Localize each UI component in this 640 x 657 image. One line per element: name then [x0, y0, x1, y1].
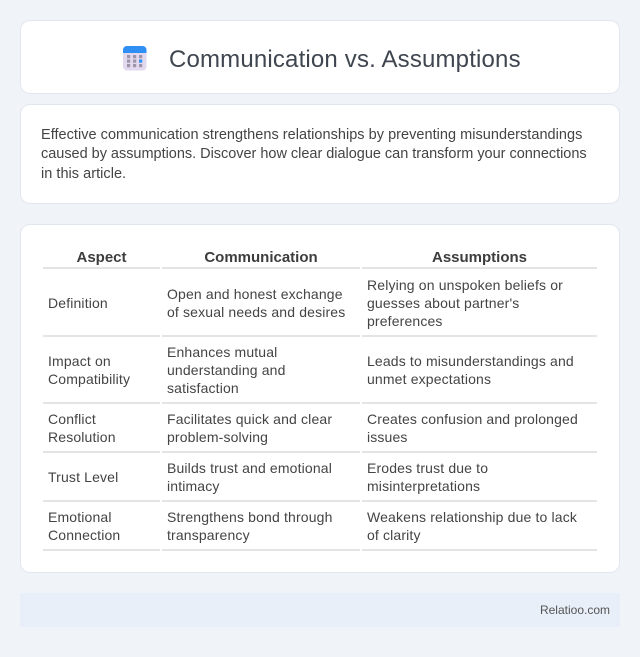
row label: Conflict Resolution: Conflict [48, 411, 96, 427]
row label: Emotional Connection: Emotional [48, 509, 112, 525]
cell: Emotional communication: Strengthens bond through [167, 509, 333, 525]
title: Communication vs. Assumptions [169, 46, 521, 73]
cell: Impact communication [167, 344, 286, 396]
cell: Conflict assumptions: Creates confusion and prolonged [367, 411, 578, 427]
cell: Definition communication: of sexual needs and desires [167, 304, 345, 320]
cell: Trust assumptions: Erodes trust due to [367, 460, 488, 476]
row label: Definition: Definition [48, 295, 108, 311]
row label: Impact on Compatibility: Compatibility [48, 371, 130, 387]
text block: introduction: Effective communication strengthens relationships by preventing misunderstandings [41, 127, 582, 143]
cell: Impact communication: satisfaction [167, 380, 239, 396]
cell: Impact assumptions: unmet expectations [367, 371, 491, 387]
cell: Trust assumptions: misinterpretations [367, 478, 480, 494]
cell: Emotional assumptions: Weakens relationship due to lack [367, 509, 577, 525]
table header: Aspect: Aspect [76, 249, 127, 266]
cell: Impact assumptions: Leads to misunderstandings and [367, 353, 574, 369]
cell: Conflict assumptions: issues [367, 429, 408, 445]
cell: Impact communication: Enhances mutual [167, 344, 277, 360]
row label: Impact on Compatibility: Impact on [48, 353, 111, 369]
cell: Definition communication [167, 286, 345, 320]
text block: introduction [41, 127, 587, 182]
footer bar [20, 593, 620, 627]
cell: Conflict assumptions [367, 411, 578, 445]
row label: Emotional Connection: Connection [48, 527, 120, 543]
row label: Trust Level: Trust Level [48, 469, 118, 485]
cell: Definition assumptions [367, 277, 563, 329]
cell: Conflict communication: Facilitates quick and clear [167, 411, 332, 427]
table header: Communication: Communication [204, 249, 318, 266]
cell: Emotional communication: transparency [167, 527, 250, 543]
cell: Trust communication: intimacy [167, 478, 220, 494]
panel: introduction [20, 104, 620, 204]
text block: introduction: caused by assumptions. Discover how clear dialogue can transform your connections [41, 146, 587, 162]
row label: Emotional Connection [48, 509, 120, 543]
footer text: Relatioo.com [540, 603, 610, 617]
cell: Emotional assumptions [367, 509, 577, 543]
cell: Impact assumptions [367, 353, 574, 387]
cell: Impact communication: understanding and [167, 362, 286, 378]
cell: Definition assumptions: guesses about partner's [367, 295, 519, 311]
cell: Trust communication: Builds trust and emotional [167, 460, 332, 476]
cell: Trust assumptions [367, 460, 488, 494]
table header: Assumptions: Assumptions [432, 249, 527, 266]
text block: introduction: in this article. [41, 166, 126, 182]
row label: Conflict Resolution [48, 411, 116, 445]
cell: Emotional assumptions: of clarity [367, 527, 421, 543]
panel: comparison table [20, 224, 620, 573]
cell: Definition communication: Open and honest exchange [167, 286, 343, 302]
cell: Definition assumptions: Relying on unspoken beliefs or [367, 277, 563, 293]
panel: title card [20, 20, 620, 94]
icon: calendar [123, 46, 146, 70]
row label: Impact on Compatibility [48, 353, 130, 387]
cell: Conflict communication: problem-solving [167, 429, 268, 445]
cell: Conflict communication [167, 411, 332, 445]
cell: Definition assumptions: preferences [367, 313, 443, 329]
cell: Trust communication [167, 460, 332, 494]
cell: Emotional communication [167, 509, 333, 543]
row label: Conflict Resolution: Resolution [48, 429, 116, 445]
